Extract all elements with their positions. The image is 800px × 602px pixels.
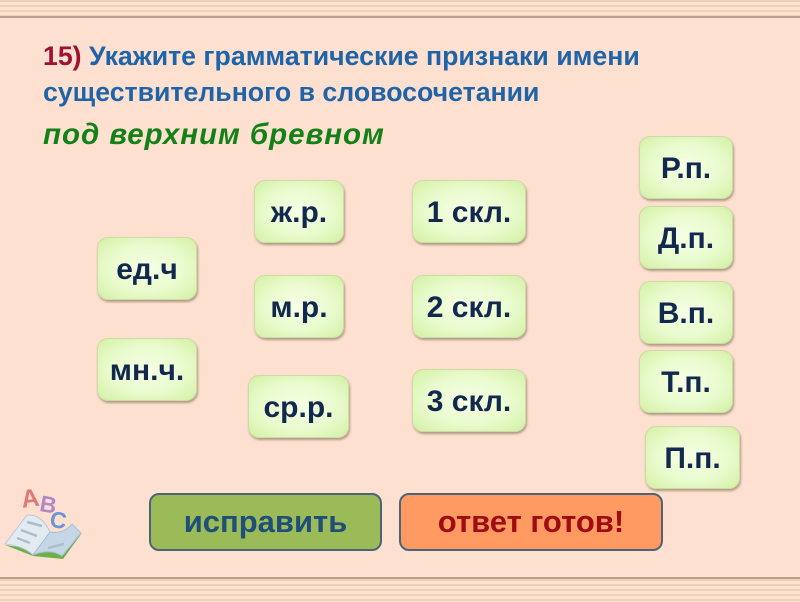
icon: ABC book: C <box>48 506 68 534</box>
gender chip: neuter <box>248 375 349 438</box>
case chip: genitive: Р.п. <box>661 152 711 185</box>
button: answer ready: ответ готов! <box>438 504 624 539</box>
number chip: singular: ед.ч <box>116 253 178 286</box>
gender chip: masculine <box>254 275 344 338</box>
case chip: accusative <box>639 281 733 344</box>
case chip: instrumental: Т.п. <box>661 366 711 399</box>
declension chip 3: 3 скл. <box>427 385 511 418</box>
button: answer ready <box>399 493 663 551</box>
declension chip 3 <box>412 369 526 432</box>
case chip: prepositional <box>645 426 740 489</box>
case chip: prepositional: П.п. <box>664 442 721 475</box>
declension chip 1: 1 скл. <box>427 196 511 229</box>
phrase in green: под верхним бревном <box>43 118 385 151</box>
bottom decorative band <box>0 577 800 602</box>
number chip: plural <box>97 338 197 401</box>
gender chip: neuter: ср.р. <box>263 391 334 424</box>
button: correct: исправить <box>184 504 347 539</box>
case chip: dative <box>639 206 733 269</box>
icon: ABC book: B <box>38 490 59 519</box>
case chip: genitive <box>639 136 733 199</box>
button: correct <box>149 493 382 551</box>
gender chip: masculine: м.р. <box>270 291 328 324</box>
question heading <box>43 41 640 107</box>
number chip: singular <box>97 237 197 300</box>
case chip: dative: Д.п. <box>658 222 714 255</box>
declension chip 2 <box>412 275 526 338</box>
case chip: accusative: В.п. <box>658 297 714 330</box>
question heading: 15) Укажите грамматические признаки имени <box>43 41 640 71</box>
number chip: plural: мн.ч. <box>110 354 184 387</box>
gender chip: feminine: ж.р. <box>271 196 327 229</box>
declension chip 2: 2 скл. <box>427 291 511 324</box>
declension chip 1 <box>412 180 526 243</box>
gender chip: feminine <box>254 180 344 243</box>
icon: ABC book <box>4 484 82 559</box>
top decorative band <box>0 0 800 18</box>
icon: ABC book: A <box>19 484 41 514</box>
question heading: существительного в словосочетании <box>43 77 539 107</box>
case chip: instrumental <box>639 350 733 413</box>
